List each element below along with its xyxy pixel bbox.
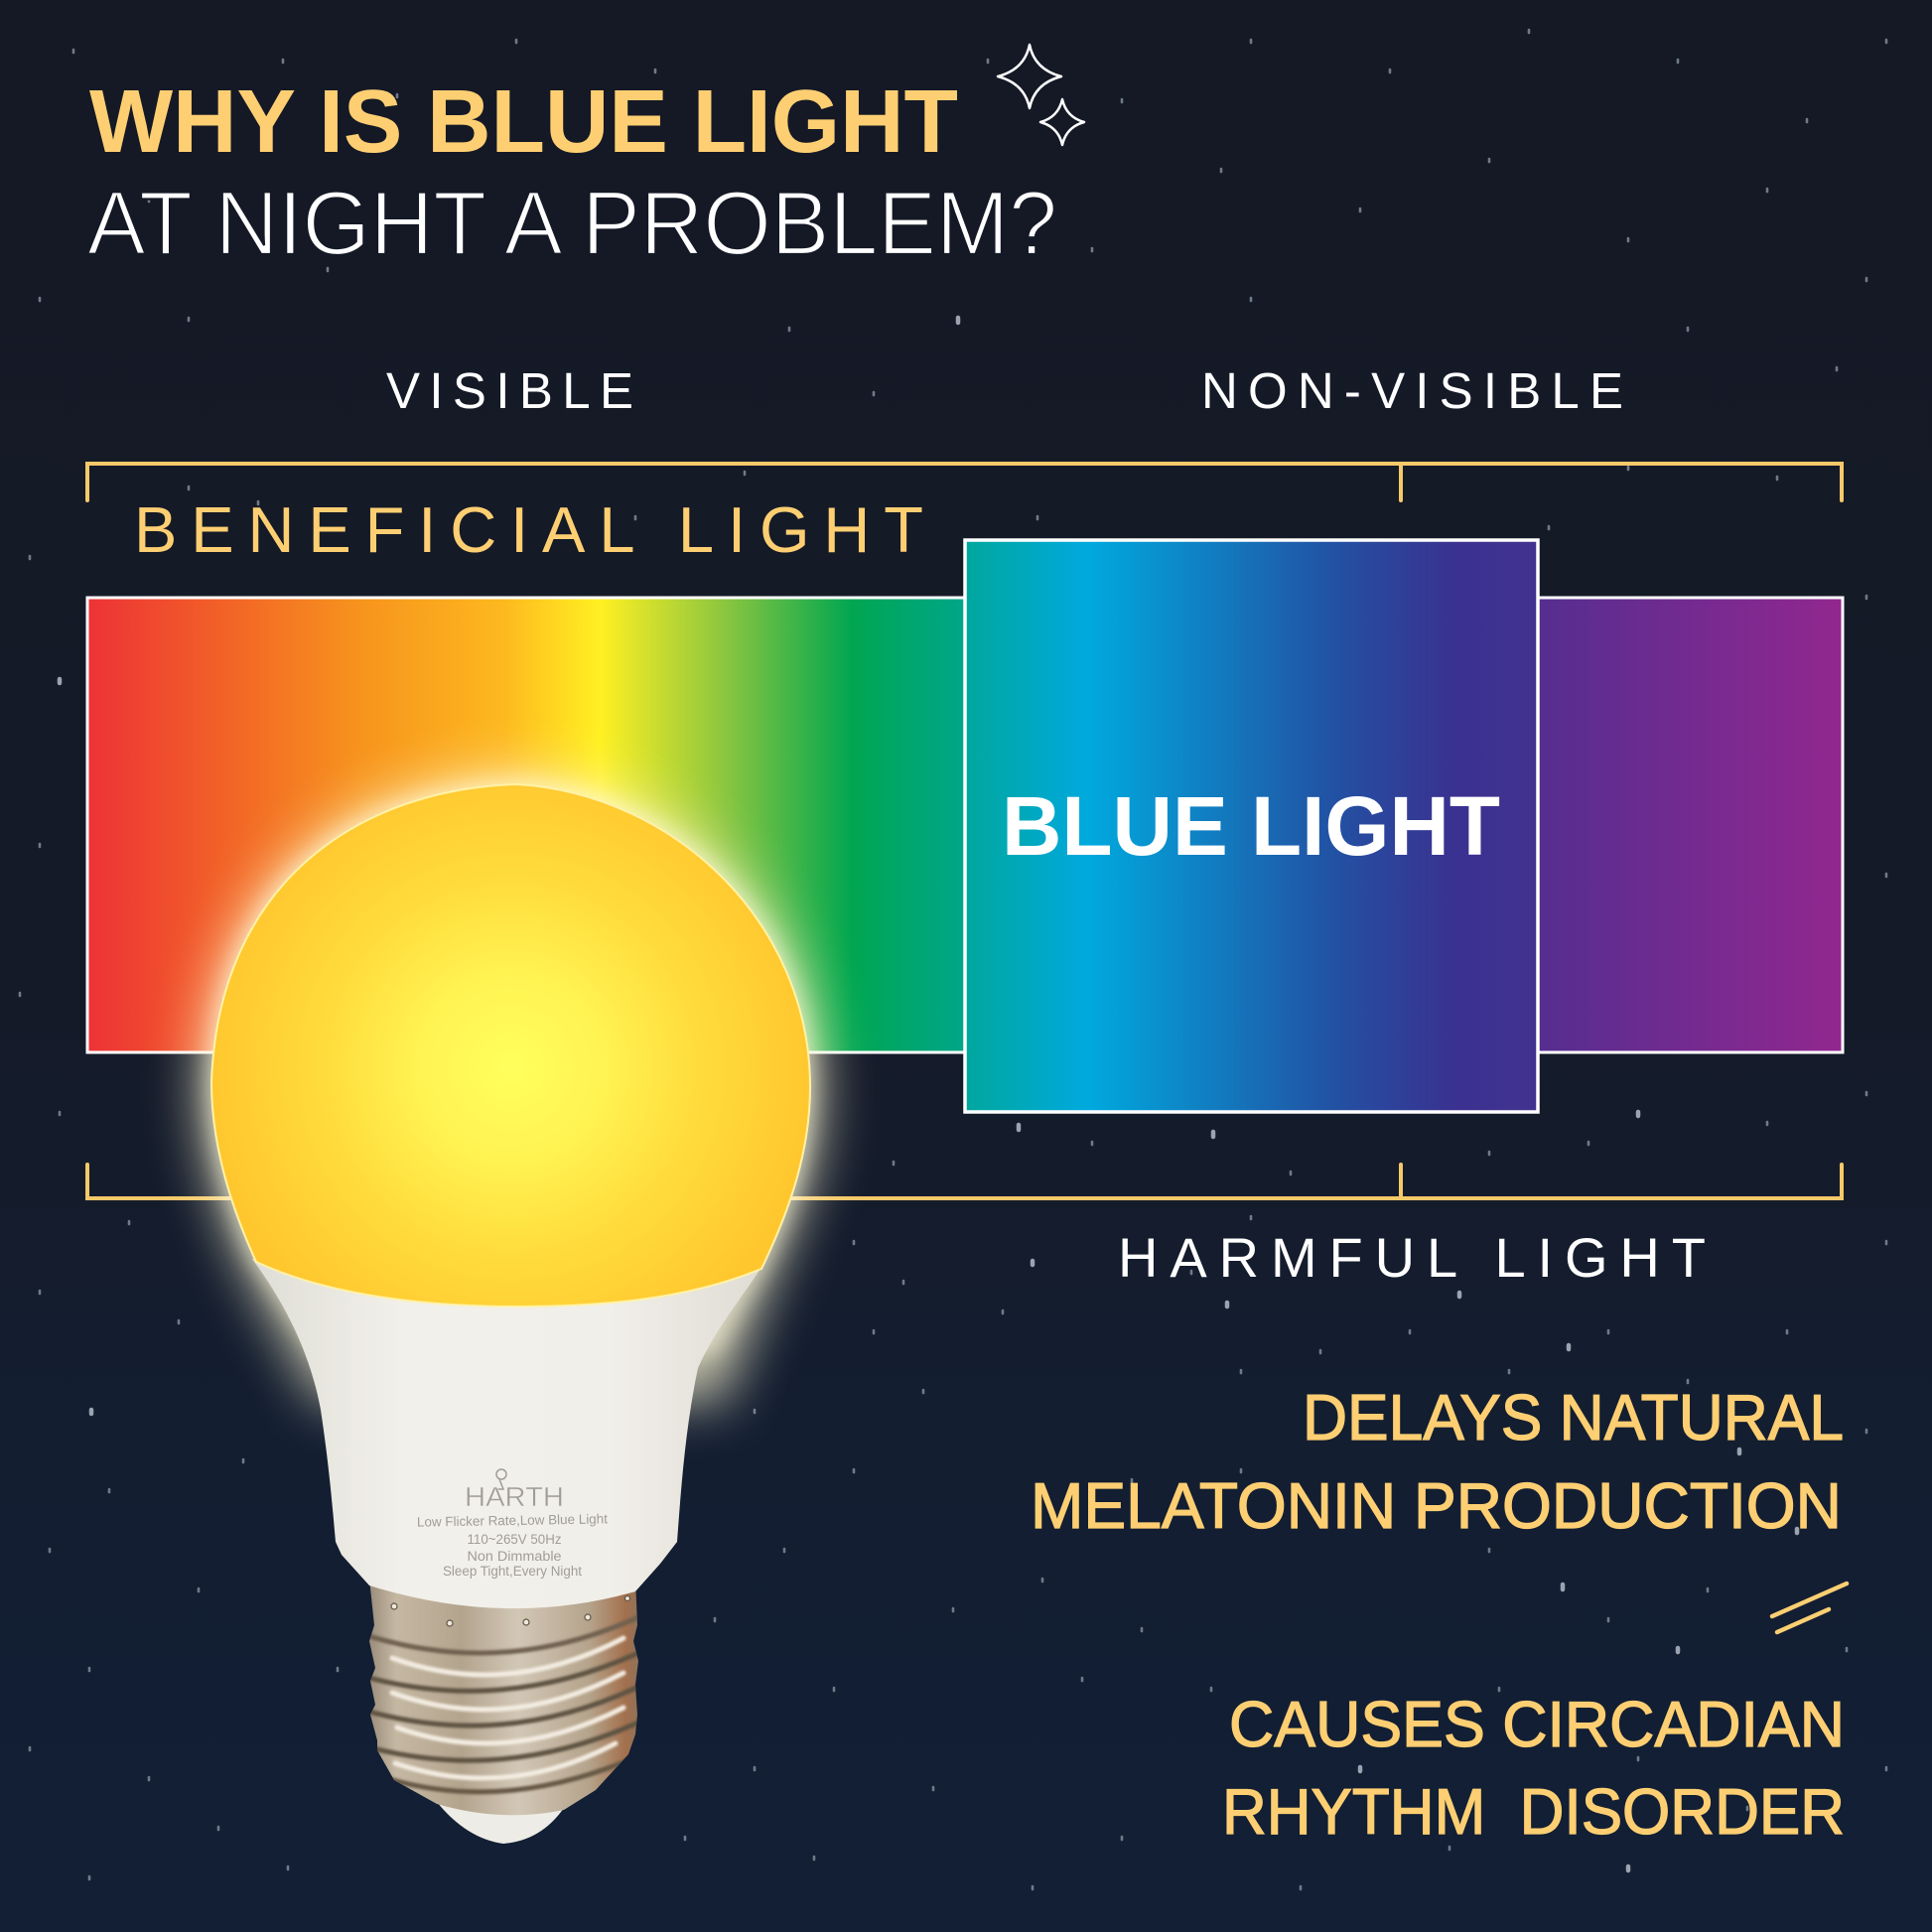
label: beneficial light: BENEFICIAL LIGHT: [134, 493, 923, 566]
bulb white body: [252, 1259, 764, 1608]
icon: double slash divider: [1772, 1584, 1847, 1632]
bottom bracket: [87, 1165, 1842, 1198]
effect 2 text: [1222, 1688, 1845, 1848]
screw base: [369, 1586, 638, 1815]
label: visible: VISIBLE: [386, 362, 633, 419]
brand name: HARTH: [465, 1481, 564, 1512]
label: harmful light: HARMFUL LIGHT: [1118, 1226, 1706, 1289]
title: [87, 72, 1057, 274]
top bracket: [87, 464, 1842, 500]
effect 2 line 2: RHYTHM DISORDER: [1222, 1775, 1845, 1848]
spec line 3: Non Dimmable: [467, 1549, 562, 1564]
title line 1: WHY IS BLUE LIGHT: [89, 72, 958, 172]
spec line 2: 110~265V 50Hz: [467, 1532, 562, 1547]
effect 1 line 2: MELATONIN PRODUCTION: [1031, 1469, 1842, 1542]
effect 2 line 1: CAUSES CIRCADIAN: [1229, 1688, 1845, 1760]
brand pin icon: [496, 1469, 506, 1489]
label: non-visible: NON-VISIBLE: [1201, 362, 1623, 419]
bulb printed label: [417, 1469, 608, 1579]
blue light label: BLUE LIGHT: [1002, 779, 1500, 873]
visible spectrum bar: [87, 598, 971, 1052]
bulb near glow: [211, 784, 810, 1350]
base contact tip: [433, 1787, 568, 1844]
spec line 4: Sleep Tight,Every Night: [443, 1564, 582, 1579]
spec line 1: Low Flicker Rate,Low Blue Light: [417, 1511, 608, 1530]
title line 2: AT NIGHT A PROBLEM?: [87, 174, 1057, 274]
effect 1 text: [1031, 1381, 1844, 1542]
lit yellow dome: [211, 784, 810, 1307]
non-visible spectrum bar: [1534, 598, 1843, 1052]
icon: sparkles: [998, 45, 1084, 145]
bulb outer glow: [211, 784, 810, 1390]
light bulb: [211, 784, 810, 1844]
effect 1 line 1: DELAYS NATURAL: [1303, 1381, 1844, 1453]
rivets on base: [391, 1596, 629, 1626]
blue light panel: [965, 540, 1538, 1112]
